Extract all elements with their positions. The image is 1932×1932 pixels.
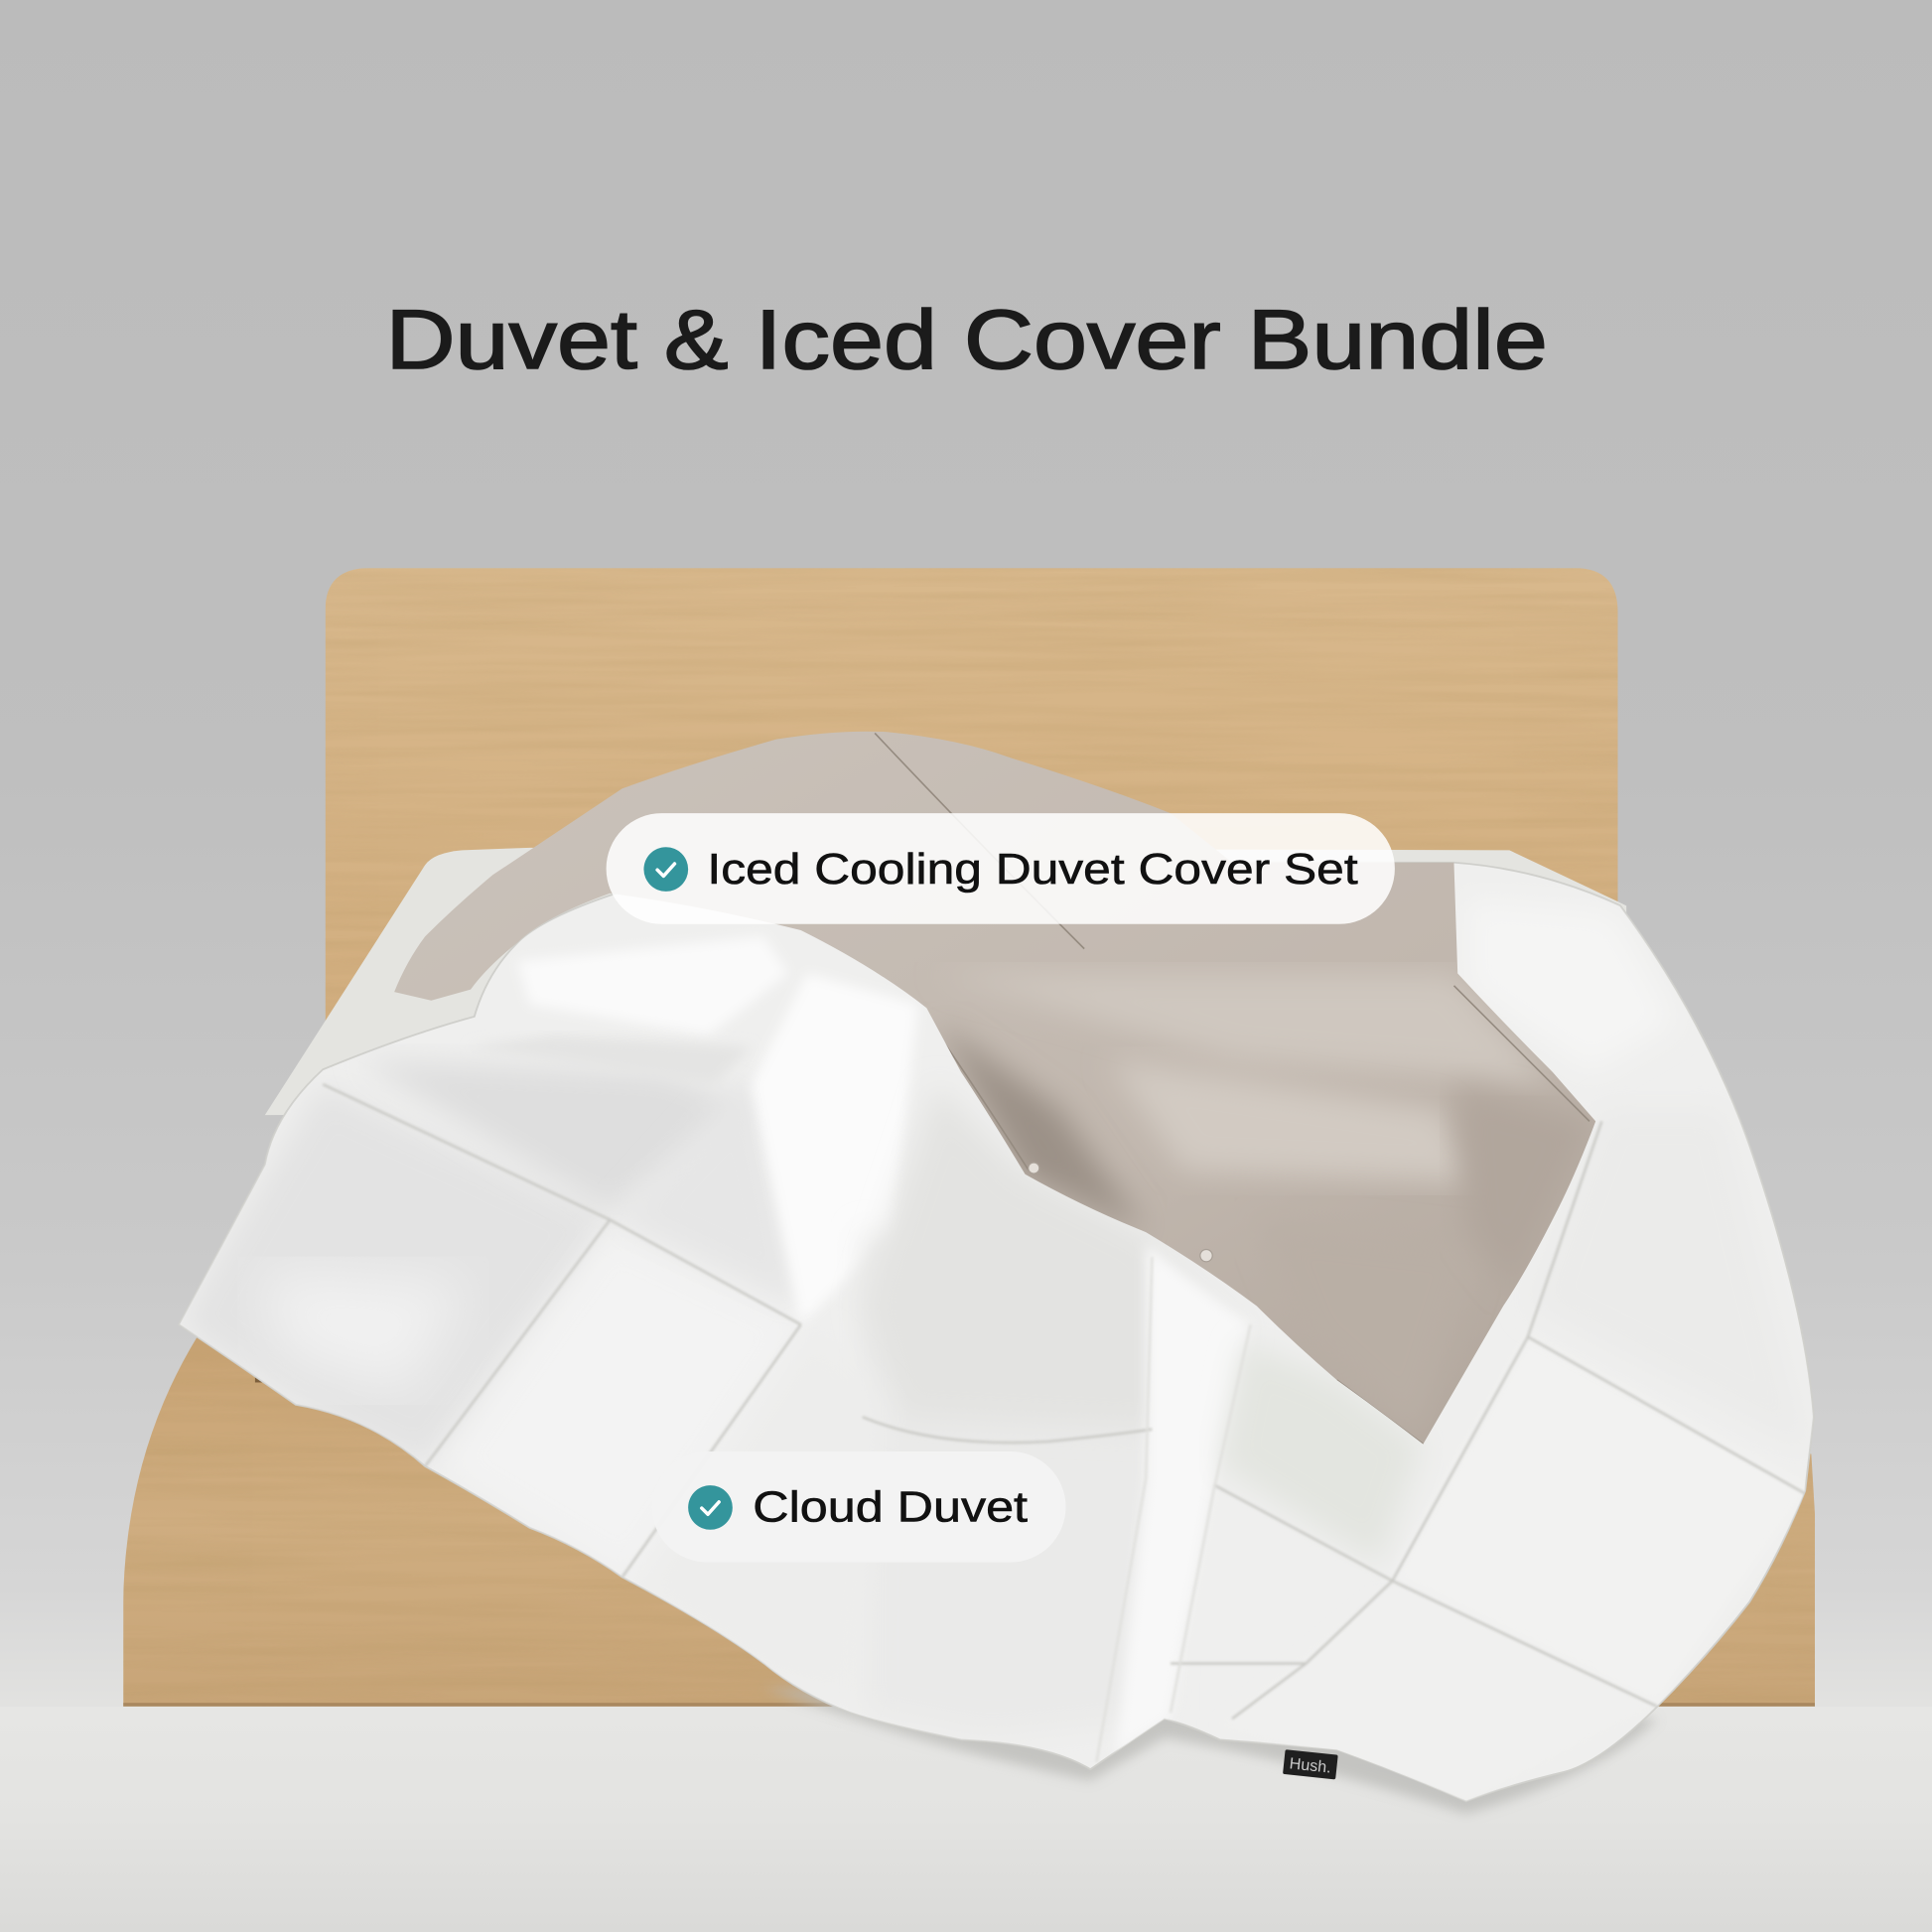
label: Cloud Duvet: Cloud Duvet xyxy=(753,1484,1028,1532)
cover buttons xyxy=(1029,1163,1212,1262)
hush label tag xyxy=(1283,1749,1338,1779)
duvet shading: centre folds xyxy=(640,1084,1251,1756)
icon: check badge xyxy=(643,847,688,892)
bed headboard xyxy=(326,568,1618,1024)
taupe iced cooling duvet cover xyxy=(394,732,1595,1445)
hush label tag: Hush. xyxy=(1289,1754,1332,1777)
duvet seams xyxy=(323,1084,1811,1762)
title: Duvet & Iced Cover Bundle xyxy=(385,293,1548,386)
icon: check badge xyxy=(688,1485,733,1530)
background floor xyxy=(0,1707,1932,1932)
cover highlights and folds xyxy=(936,973,1595,1442)
pill: Cloud Duvet xyxy=(652,1451,1066,1563)
pill: Iced Cooling Duvet Cover Set xyxy=(607,813,1395,924)
duvet shading: left panels xyxy=(179,936,918,1578)
bed base xyxy=(123,1337,1815,1707)
mattress xyxy=(265,848,1626,1115)
label: Iced Cooling Duvet Cover Set: Iced Cooling Duvet Cover Set xyxy=(707,846,1358,894)
duvet shading: right panels xyxy=(1182,899,1811,1801)
duvet floor shadow xyxy=(763,1688,1657,1814)
white cloud duvet xyxy=(179,863,1814,1801)
cover edge lines xyxy=(875,733,1589,1445)
